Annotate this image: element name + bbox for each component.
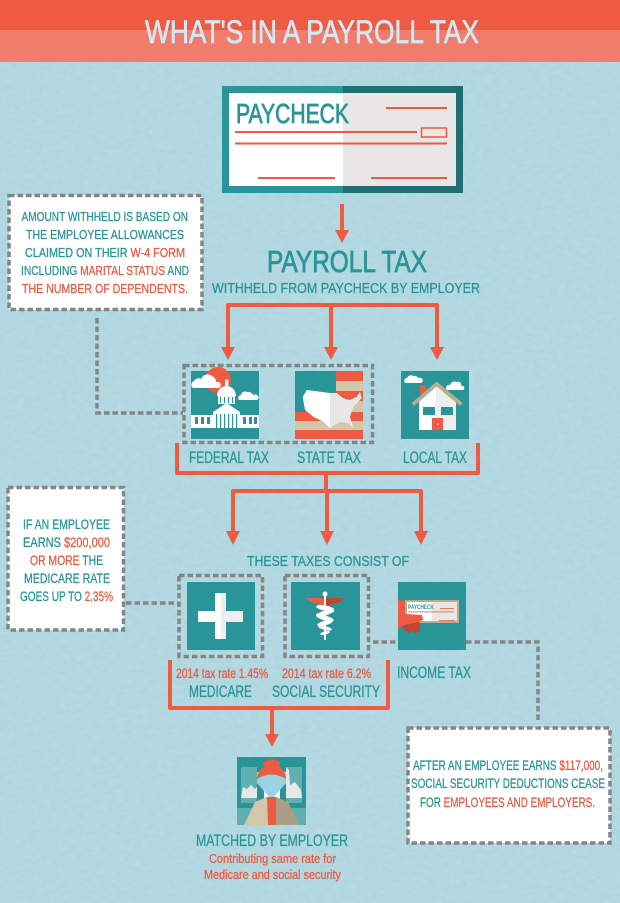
callout: W-4 allowances: AMOUNT WITHHELD IS BASED ON [22, 209, 188, 224]
labels: tax levels [189, 449, 467, 467]
icon: paycheck [222, 86, 463, 193]
title: WHAT'S IN A PAYROLL TAX [145, 14, 479, 50]
labels: tax levels: STATE TAX [297, 449, 361, 467]
connector: callout to federal and state taxes [97, 318, 183, 413]
callout: W-4 allowances: THE NUMBER OF DEPENDENTS. [22, 281, 188, 296]
dashed frame: social security [285, 576, 368, 656]
labels: tax levels: LOCAL TAX [403, 449, 467, 467]
labels: tax levels: FEDERAL TAX [189, 449, 269, 467]
arrows: payroll tax branches [221, 305, 444, 360]
icon: local house [401, 371, 469, 439]
bracket and arrows: taxes consist of [177, 443, 478, 545]
icon: income tax hand with check [398, 582, 466, 650]
arrow: paycheck to payroll tax [335, 204, 349, 243]
note: contributing same rate [204, 851, 341, 882]
heading: matched by employer [196, 832, 348, 882]
icon: caduceus [291, 582, 360, 650]
callout: medicare rate: EARNS $200,000 [23, 535, 110, 550]
social security rate and label [272, 665, 380, 701]
heading: payroll tax [212, 244, 480, 297]
label: income tax: INCOME TAX [397, 664, 471, 682]
callout: social security cap: AFTER AN EMPLOYEE EARNS $117,000, [413, 758, 603, 773]
social security rate and label: SOCIAL SECURITY [272, 683, 380, 701]
icon: income tax hand with check: PAYCHECK [408, 605, 435, 611]
heading: matched by employer: MATCHED BY EMPLOYER [196, 832, 348, 850]
callout: social security cap [408, 728, 610, 843]
medicare rate and label: 2014 tax rate 1.45% [176, 665, 268, 681]
callout: medicare rate: MEDICARE RATE [24, 571, 110, 586]
medicare rate and label [176, 665, 268, 701]
connector: medicare callout [126, 601, 178, 605]
dashed frame: medicare [179, 576, 262, 656]
icon: federal capitol [191, 367, 259, 439]
callout: W-4 allowances [9, 196, 202, 310]
connector: social security callout [373, 642, 538, 722]
callout: W-4 allowances: INCLUDING MARITAL STATUS AND [21, 263, 189, 278]
callout: W-4 allowances: CLAIMED ON THEIR W-4 FORM [25, 245, 185, 260]
subheading: WITHHELD FROM PAYCHECK BY EMPLOYER [212, 281, 480, 297]
social security rate and label: 2014 tax rate 6.2% [282, 665, 371, 681]
dashed group: federal and state [184, 366, 372, 442]
icon: paycheck: PAYCHECK [236, 98, 349, 129]
heading: payroll tax: PAYROLL TAX [267, 244, 427, 279]
callout: medicare rate: IF AN EMPLOYEE [23, 517, 110, 532]
note: contributing same rate: Medicare and social security [204, 867, 341, 882]
bracket and arrow: matched by employer [170, 660, 388, 747]
icon: employer figure [237, 757, 306, 825]
icon: state map and flag [295, 371, 363, 439]
callout: W-4 allowances: THE EMPLOYEE ALLOWANCES [26, 227, 184, 242]
medicare rate and label: MEDICARE [189, 683, 252, 701]
note: contributing same rate: Contributing same rate for [209, 851, 337, 866]
header banner [0, 0, 620, 62]
callout: medicare rate: OR MORE THE [30, 553, 103, 568]
callout: medicare rate: GOES UP TO 2.35% [20, 589, 113, 604]
callout: medicare rate [8, 488, 124, 630]
heading: these taxes consist of: THESE TAXES CONSIST OF [247, 554, 409, 570]
icon: medicare cross [187, 582, 255, 650]
